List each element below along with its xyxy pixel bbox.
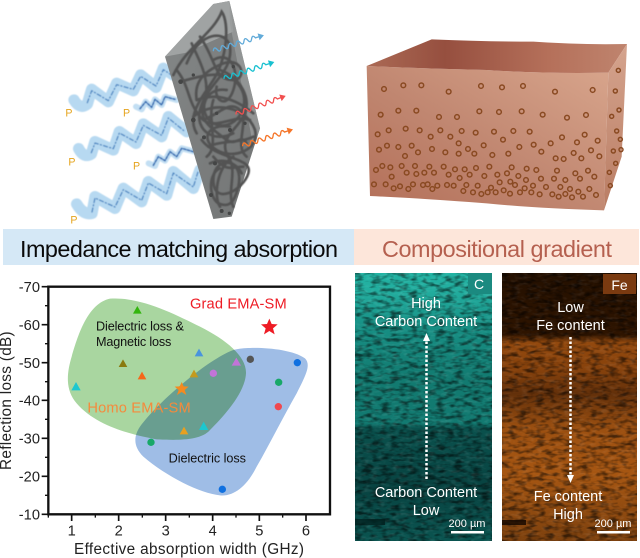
y tick labels: -50: [19, 356, 40, 372]
y tick labels: -60: [19, 318, 40, 334]
axes frame: [42, 287, 330, 521]
labels: P: P: [133, 161, 140, 173]
text: carbon content low: Carbon Content: [375, 485, 477, 501]
arrow: downward: [567, 337, 574, 483]
text: Fe content high: [534, 489, 602, 523]
text: Fe content high: High: [553, 507, 583, 523]
x axis title: Effective absorption width (GHz): [74, 541, 304, 558]
text: low Fe content: Low: [557, 300, 584, 316]
region labels: Dielectric loss: [169, 451, 246, 465]
text: low Fe content: Fe content: [536, 318, 605, 334]
chart: reflection loss vs effective absorption width: [0, 280, 330, 558]
scale bar: 200 µm: 200 µm: [449, 518, 485, 530]
text: high carbon content: High: [411, 296, 441, 312]
series labels: Grad EMA-SM: [190, 296, 287, 312]
text: Fe content high: Fe content: [534, 489, 602, 505]
x tick labels: 6: [302, 524, 310, 540]
region: dielectric loss: [135, 348, 308, 495]
region: dielectric and magnetic loss: [68, 299, 246, 440]
circle markers: [147, 356, 301, 493]
y tick labels: -10: [19, 508, 40, 524]
region labels: Dielectric loss &: [96, 319, 185, 333]
map: iron distribution: [502, 273, 637, 541]
arrow: upward: [423, 333, 430, 479]
map: carbon distribution: [355, 273, 492, 541]
incident waves: [74, 68, 200, 214]
illustration: electromagnetic waves passing through absorber: [65, 1, 293, 226]
absorber panel: [165, 1, 260, 219]
y tick labels: -30: [19, 432, 40, 448]
x tick labels: 2: [115, 524, 123, 540]
x tick labels: 5: [255, 524, 263, 540]
outgoing wavy arrows: [213, 33, 293, 148]
labels: P: P: [123, 107, 130, 119]
banner: Compositional gradient: Compositional gradient: [382, 236, 612, 262]
y tick labels: -70: [19, 280, 40, 296]
illustration: gradient block with particles: [367, 39, 627, 210]
labels: P: P: [65, 107, 72, 119]
x tick labels: 3: [162, 524, 170, 540]
text: low Fe content: [536, 300, 605, 334]
element tag C: [468, 273, 492, 294]
region labels: Magnetic loss: [96, 335, 171, 349]
labels: P: P: [68, 157, 75, 169]
text: high carbon content: [375, 296, 477, 330]
text: high carbon content: Carbon Content: [375, 314, 477, 330]
y tick labels: [19, 280, 40, 524]
chart: reflection loss vs effective absorption width: Homo EMA-SM: [87, 400, 191, 416]
banner: Compositional gradient: [354, 229, 639, 265]
y tick labels: -40: [19, 394, 40, 410]
labels: P: [65, 107, 140, 226]
star: Grad EMA-SM: [261, 319, 278, 334]
element tag Fe: Fe: [611, 277, 628, 293]
x tick labels: 4: [209, 524, 217, 540]
banner: Impedance matching absorption: [3, 229, 354, 265]
labels: P: P: [70, 214, 77, 226]
triangle markers: [71, 306, 241, 434]
element tag C: C: [474, 276, 484, 292]
star: Homo EMA-SM: [175, 382, 189, 395]
x tick labels: 1: [68, 524, 76, 540]
y tick labels: -20: [19, 470, 40, 486]
banner: Impedance matching absorption: Impedance matching absorption: [20, 236, 338, 262]
element tag Fe: [603, 274, 636, 294]
text: carbon content low: [375, 485, 477, 519]
region labels: [96, 319, 246, 465]
scale bar: 200 µm: 200 µm: [595, 518, 631, 530]
x tick labels: [68, 524, 310, 540]
text: carbon content low: Low: [413, 503, 440, 519]
